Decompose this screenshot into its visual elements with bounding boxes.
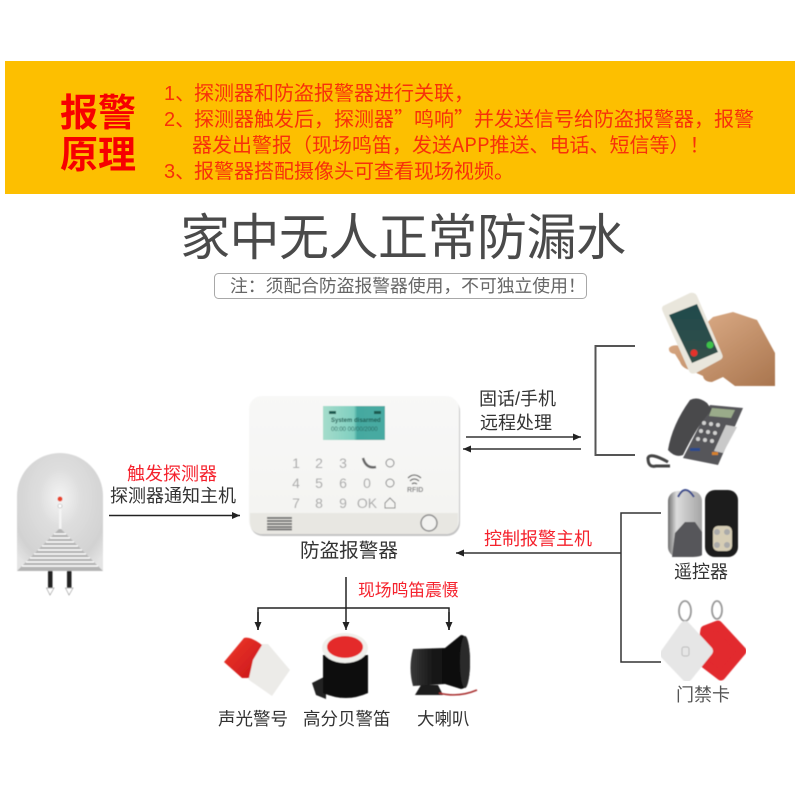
- icon: high decibel siren: [312, 633, 368, 699]
- RFID mark: RFID: [407, 487, 423, 494]
- banner heading: 原理: [60, 124, 136, 179]
- keypad: [292, 455, 395, 511]
- note box: 注：须配合防盗报警器使用，不可独立使用！: [230, 272, 586, 298]
- LCD screen: 00:00 00/00/2000: [331, 427, 378, 433]
- icon: water detector: [17, 453, 103, 595]
- label: detector notifies host: 探测器通知主机: [110, 486, 236, 506]
- banner heading: [60, 82, 136, 179]
- banner text: steps: 报警器搭配摄像头可查看现场视频。: [194, 155, 514, 184]
- banner heading: 报警: [60, 82, 136, 137]
- arrow: phones to host: [463, 448, 581, 450]
- label: remote: 遥控器: [674, 562, 728, 582]
- label: on-site siren: 现场鸣笛震慑: [358, 581, 459, 600]
- icon: alarm host panel: [249, 396, 460, 536]
- icon: hand holding smartphone: [662, 293, 775, 386]
- RFID mark: [407, 475, 423, 494]
- icon: horn speaker: [410, 635, 477, 695]
- label: remote handling: 远程处理: [480, 413, 552, 433]
- keypad: 7: [292, 495, 300, 511]
- banner text: steps: 3、: [164, 155, 195, 184]
- connector: phones bracket: [596, 346, 635, 455]
- keypad: 0: [363, 475, 371, 491]
- label: remote handling: [479, 389, 556, 433]
- keypad: 1: [292, 455, 300, 471]
- arrow: host to phones: [466, 436, 581, 438]
- icon: desk telephone: [648, 399, 743, 466]
- label: control host: 控制报警主机: [484, 529, 592, 549]
- banner text: steps: 1、: [164, 77, 195, 106]
- keypad: OK: [357, 495, 378, 511]
- banner text: steps: 探测器触发后，探测器”鸣响”并发送信号给防盗报警器，报警: [194, 103, 754, 132]
- labels: siren types: 大喇叭: [417, 709, 470, 729]
- speaker grille: [267, 518, 292, 530]
- keypad: 3: [339, 455, 347, 471]
- label: remote handling: 固话/手机: [479, 389, 556, 409]
- banner text: steps: [164, 77, 754, 184]
- keypad: 6: [339, 475, 347, 491]
- connector: remotes bracket with arrow to host: [456, 513, 661, 662]
- keypad: 2: [315, 455, 323, 471]
- icon: access cards: [665, 601, 742, 677]
- labels: siren types: 高分贝警笛: [303, 709, 390, 729]
- LCD screen: [323, 406, 385, 440]
- keypad: 5: [315, 475, 323, 491]
- banner text: steps: 2、: [164, 103, 195, 132]
- banner text: steps: 器发出警报（现场鸣笛，发送APP推送、电话、短信等）！: [192, 129, 709, 158]
- label: trigger detector: 触发探测器: [127, 464, 217, 484]
- icon: strobe siren: [224, 638, 290, 696]
- banner: alarm principle: [5, 61, 795, 194]
- arrows: host to sirens: [258, 577, 449, 630]
- banner text: steps: 探测器和防盗报警器进行关联，: [194, 77, 474, 106]
- label: access card: 门禁卡: [676, 685, 730, 705]
- labels: siren types: [218, 709, 470, 729]
- icon: remote controls: [668, 490, 738, 557]
- labels: siren types: 声光警号: [218, 709, 288, 729]
- arrow: detector to host: [109, 514, 240, 516]
- keypad: 4: [292, 475, 300, 491]
- LCD screen: System disarmed: [331, 418, 381, 424]
- title: 家中无人正常防漏水: [180, 198, 626, 270]
- keypad: 8: [315, 495, 323, 511]
- label: host: 防盗报警器: [300, 534, 398, 563]
- keypad: 9: [339, 495, 347, 511]
